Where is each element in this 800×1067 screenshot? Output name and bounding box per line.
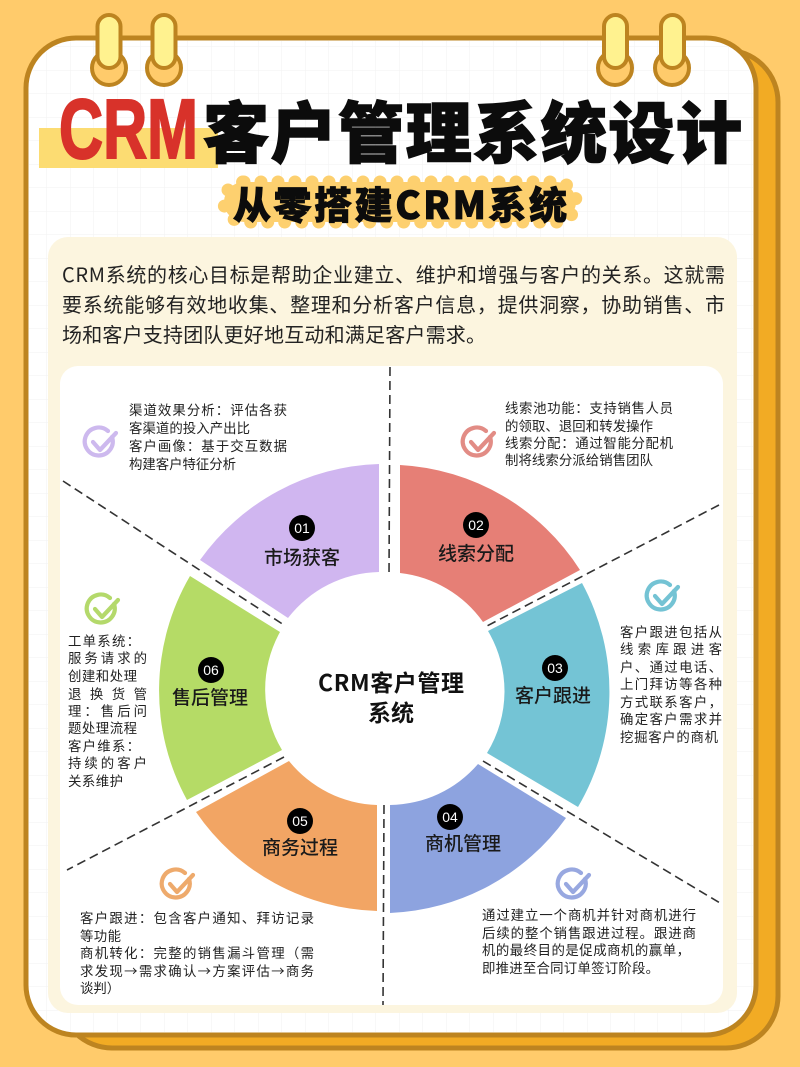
center title [318, 664, 464, 728]
panel: cream container [48, 237, 737, 1013]
divider lines [63, 367, 720, 1005]
text block 06: 服务请求的 [68, 647, 147, 667]
center title: 系统 [368, 694, 414, 728]
text block 05 [80, 907, 314, 997]
text block 01: 构建客户特征分析 [129, 453, 236, 473]
donut segment 06: 售后管理 [172, 683, 248, 710]
text block 02 [505, 397, 674, 469]
text block 06: 创建和处理 [68, 665, 137, 685]
intro text: CRM系统的核心目标是帮助企业建立、维护和增强与客户的关系。这就需 [62, 259, 725, 288]
text block 02: 线索分配：通过智能分配机 [505, 432, 674, 452]
binder rings [92, 15, 689, 85]
text block 05: 商机转化：完整的销售漏斗管理（需 [80, 942, 314, 962]
intro text: 场和客户支持团队更好地互动和满足客户需求。 [62, 319, 486, 348]
text block 01: 客渠道的投入产出比 [129, 417, 250, 437]
text block 01 [129, 399, 287, 473]
badge shape [224, 182, 576, 222]
ring 3 [598, 15, 632, 85]
subtitle badge [224, 175, 576, 230]
text block 03: 上门拜访等各种 [620, 673, 722, 693]
text block 06: 退换货管 [68, 683, 147, 703]
text block 03: 客户跟进包括从 [620, 621, 722, 641]
ring 1 [92, 15, 126, 85]
donut segment 04: 商机管理 [425, 829, 501, 856]
text block 05: 谈判） [80, 977, 120, 997]
text block 04: 即推进至合同订单签订阶段。 [482, 957, 659, 977]
donut segment 01 [200, 464, 379, 618]
text block 06: 理：售后问 [68, 700, 147, 720]
donut segment 06 [159, 576, 282, 800]
donut segment 04 [390, 764, 566, 913]
text block 03: 户、通过电话、 [620, 656, 722, 676]
donut segment 05 [196, 761, 377, 911]
text block 06: 工单系统： [68, 630, 140, 650]
text block 04: 通过建立一个商机并针对商机进行 [482, 904, 696, 924]
text block 06: 关系维护 [68, 770, 123, 790]
text block 04 [482, 904, 696, 977]
text block 05: 求发现→需求确认→方案评估→商务 [80, 960, 314, 980]
donut segment 02: 02 [468, 517, 484, 533]
text block 03: 确定客户需求并 [620, 708, 722, 728]
text block 04: 后续的整个销售跟进过程。跟进商 [482, 922, 696, 942]
text block 04: 机的最终目的是促成商机的赢单， [482, 939, 690, 959]
icon: check red [463, 428, 494, 456]
icon: check green [87, 595, 118, 623]
donut segment 06: 06 [203, 662, 219, 678]
text block 03: 挖掘客户的商机 [620, 726, 719, 746]
text block 03: 线索库跟进客 [620, 638, 722, 658]
icon: check purple [85, 428, 116, 456]
icon: check orange [162, 870, 193, 898]
center title: CRM客户管理 [318, 664, 464, 698]
text block 03: 方式联系客户， [620, 691, 722, 711]
text block 02: 的领取、退回和转发操作 [505, 415, 653, 435]
panel: white diagram [60, 366, 723, 1005]
donut segment 01: 市场获客 [264, 543, 340, 570]
ring 4 [655, 15, 689, 85]
text block 01: 客户画像：基于交互数据 [129, 435, 287, 455]
title CRM: CRM [59, 82, 198, 176]
intro text: 要系统能够有效地收集、整理和分析客户信息，提供洞察，协助销售、市 [62, 289, 725, 318]
text block 06 [68, 630, 147, 790]
text block 06: 客户维系： [68, 735, 140, 755]
donut segment 03: 03 [547, 660, 563, 676]
donut segment 03: 客户跟进 [515, 681, 591, 708]
donut segment 05: 05 [292, 813, 308, 829]
text block 06: 题处理流程 [68, 717, 137, 737]
donut segment 05: 商务过程 [262, 833, 338, 860]
text block 02: 制将线索分派给销售团队 [505, 449, 654, 469]
icon: check teal [647, 582, 678, 610]
subtitle text: 从零搭建CRM系统 [233, 175, 567, 230]
text block 05: 客户跟进：包含客户通知、拜访记录 [80, 907, 314, 927]
title main: 客户管理系统设计 [203, 81, 742, 177]
text block 01: 渠道效果分析：评估各获 [129, 399, 287, 419]
ring 2 [147, 15, 181, 85]
icon: check blue [558, 870, 589, 898]
donut segment 02: 线索分配 [438, 539, 514, 566]
title highlight [39, 128, 218, 168]
donut segment 03 [487, 583, 609, 807]
text block 06: 持续的客户 [68, 752, 147, 772]
text block 05: 等功能 [80, 925, 121, 945]
text block 03 [620, 621, 722, 746]
donut segment 02 [400, 465, 580, 622]
donut segment 01: 01 [294, 520, 310, 536]
text block 02: 线索池功能：支持销售人员 [505, 397, 673, 417]
donut segment 04: 04 [442, 809, 458, 825]
title [39, 81, 742, 177]
intro text [62, 259, 725, 348]
